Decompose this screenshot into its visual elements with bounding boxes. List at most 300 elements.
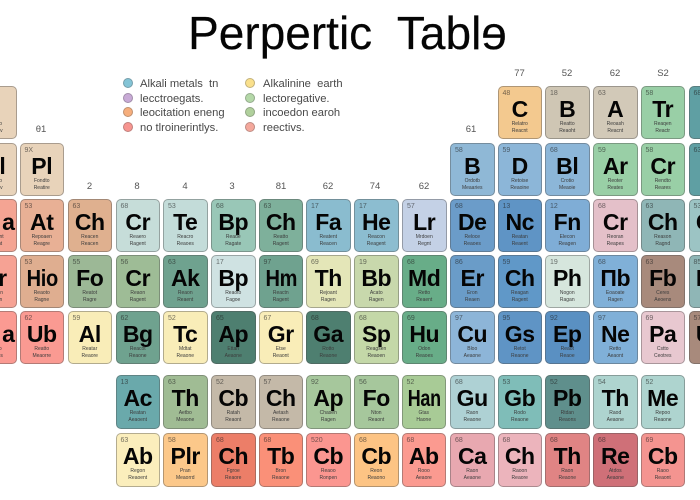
element tile: Te: Reacro [177,234,193,240]
element tile: Ch: Reagan [511,290,528,296]
element tile: Cr: 58 [646,146,653,154]
element tile: Cb: Reaoo [321,468,336,474]
element tile: Fo [354,374,398,428]
element tile: De: De [458,209,487,235]
element tile: Th: 54 [598,378,606,386]
element tile: Th: Raod [609,410,621,416]
element tile: Al: Al [79,321,101,347]
element tile: Fo: Ragre [83,297,97,303]
element tile: Bl: Meaoie [559,184,575,190]
element tile: Ac: Reatan [130,410,146,416]
element tile: Ch: Reaone [272,416,290,422]
element tile: Er: Eron [467,290,478,296]
element tile: Tb: Bron [275,468,286,474]
element tile: Ne: Retto [609,346,621,352]
element tile: Ca: 68 [455,436,463,444]
element tile: Ep: Ep [553,321,582,347]
element tile: Hu: Hu [409,321,439,347]
element tile: Fo: 55 [72,259,80,266]
element tile: right partial row 1 [688,86,700,139]
legend item: red [123,122,133,132]
element tile: Pb: 52 [550,378,558,386]
element tile: Ga: Rotto [322,346,334,352]
element tile: Ac: Aeaoent [128,416,147,422]
column number 77: 77 [514,68,525,79]
element tile: Fb [640,255,685,308]
element tile: Ar [593,142,638,196]
element tile: Bg [116,311,160,364]
element tile: Ar: Reates [607,184,623,190]
element tile: Gs [498,311,542,364]
element tile: Cr: Reapes [607,241,624,247]
element tile: Cb: Cb [361,442,391,468]
element tile: Nb: Пb [600,265,630,291]
element tile: Ch [211,432,256,486]
element tile: Ep: Reaoe [560,353,575,359]
element tile: Cr: Reaon [130,290,145,296]
element tile: Nc: 13 [502,203,510,210]
element tile: Ph [545,255,590,308]
element tile: Tc: Reaone [176,353,194,359]
element tile: Cb [211,374,256,428]
element tile: Ga [306,311,350,364]
element tile: Pb [545,374,590,428]
legend text: purple: lecctroegats. [140,93,203,105]
element tile: Hm: Ragent [273,297,289,303]
element tile: Ab: Ab [409,442,439,468]
element tile: Pa: Ceotres [654,353,672,359]
element tile: Pl: Fondto [34,178,50,184]
element tile: Bp: Reaoto [225,290,241,296]
element tile: Pl: 9X [24,146,33,154]
element tile: Ch [68,199,112,252]
element tile: Me: Reaone [654,416,672,422]
element tile: Ab: Ab [123,442,153,468]
element tile: right partial row 5 [688,311,700,364]
element tile: Ga: Reaone [319,353,337,359]
element tile: Gr [258,311,303,364]
element tile: Bb: Bb [361,265,391,291]
element tile: Cr: Reoran [607,234,623,240]
element tile: Ch: Aetash [273,410,289,416]
element tile: Cu: Aeaone [464,353,481,359]
element tile: Ch: Ch [75,209,105,235]
element tile: B: Meaaries [462,184,483,190]
element tile: Th: 69 [311,259,319,266]
element tile: Ch: 63 [264,203,271,210]
element tile: Cb: Ronpen [319,474,337,480]
element tile: Ch: Ragnd [655,241,670,247]
element tile: Ap: 92 [311,378,319,386]
element tile: Bb: Ragen [369,297,384,303]
element tile: Ab [116,432,160,486]
element tile: Ch: Ch [266,209,296,235]
element tile: Ga: Ga [313,321,343,347]
element tile: Tr: Reaqen [654,121,672,127]
element tile: Al: Reaore [82,353,98,359]
element tile: At: Reagre [34,241,50,247]
legend text: salmon: reectivs. [263,122,305,134]
element tile: At: At [30,209,53,235]
element tile: Gr: 67 [264,315,271,322]
element tile: left partial row 1 [0,86,16,139]
element tile: C: 48 [502,90,510,97]
legend item: alkali metals [123,78,133,88]
element tile: Tb: 68 [264,436,271,444]
element tile: Hio: 53 [24,259,32,266]
element tile: Hu: 69 [407,315,415,322]
element tile: Bp: 17 [216,259,224,266]
element tile: D [498,142,542,196]
element tile: He: Reacon [368,234,385,240]
element tile: Cr [116,199,160,252]
element tile: Cb [640,432,685,486]
element tile: Ub: Ub [27,321,57,347]
legend text: alkali metals: Alkali metals tn [140,78,218,90]
element tile: Er: Reaen [465,297,480,303]
element tile: Ap [306,374,350,428]
element tile: Ab: Reaoent [128,474,147,480]
element tile: Fa: Reacen [320,241,337,247]
element tile: Hu: Reaoes [416,353,433,359]
element tile: Th: Th [315,265,342,291]
column number 3: 3 [229,181,235,192]
element tile: Ep: Reaot [561,346,574,352]
element tile: Lr: Lr [413,209,435,235]
element tile: Plr: Plr [170,442,200,468]
element tile: Ap: Ettan [227,346,239,352]
element tile: Cu: Bloo [467,346,477,352]
element tile: Cr: 68 [598,203,606,210]
element tile: Lr: 57 [407,203,415,210]
element tile: Pa [640,311,685,364]
element tile: Ne [593,311,638,364]
element tile: Ak: Reaon [178,290,193,296]
element tile: C: Reacnt [512,128,528,134]
element tile: Bp: Bp [218,265,248,291]
element tile: Cr: Reaero [130,234,146,240]
element tile: At [20,199,64,252]
element tile: Bp: Fagoe [226,297,240,303]
element tile: Hio: Reaoto [34,290,50,296]
element tile: Fo: Reaont [368,416,384,422]
element tile: Ph: Nogon [560,290,575,296]
element tile: Te: Reaoes [177,241,194,247]
element tile: Plr [163,432,208,486]
element tile: Ak: 63 [168,259,176,266]
element tile: Ar: Reoter [608,178,623,184]
element tile: Re: Aeaone [607,474,624,480]
element tile: Bg: 62 [120,315,128,322]
element tile: Hm [258,255,303,308]
column number 62: 62 [419,181,429,192]
element tile: Me: Repoo [655,410,670,416]
element tile: A [593,86,638,139]
element tile: Han: Han [407,384,440,410]
element tile: Th: Aetbo [179,410,192,416]
element tile: Ar: Ar [603,152,628,178]
element tile: Ac: 13 [120,378,128,386]
element tile: Cb: Ratah [227,410,240,416]
element tile: Cb: Reaont [225,416,241,422]
element tile: He: He [362,209,391,235]
title: Perpertic Tablɘ [188,7,507,59]
element tile: Nc: Reatan [512,234,528,240]
element tile: Fo [68,255,112,308]
element tile: Cr: Ragent [130,297,146,303]
element tile: Ch: 63 [72,203,80,210]
legend item: yellow [245,78,255,88]
element tile: Ch: Raoon [512,468,527,474]
element tile: Bp: 68 [216,203,224,210]
element tile: Cb: 69 [646,436,653,444]
element tile: Plr: Pran [180,468,191,474]
element tile: Ap [211,311,256,364]
legend item: green [245,93,255,103]
element tile: Th: Ragen [321,297,336,303]
element tile: Ap: 65 [216,315,224,322]
column number θ1: θ1 [36,124,46,135]
element tile: Th [163,374,208,428]
element tile: Ph: Ph [553,265,582,291]
element tile: Ga: 68 [311,315,319,322]
element tile: Md: Reaent [416,297,432,303]
element tile: Fb: 63 [646,259,653,266]
element tile: Ch: 59 [502,259,510,266]
element tile: Ch: Reaore [512,474,528,480]
element tile: Cb [306,432,350,486]
element tile: Fa [306,199,350,252]
element tile: Fa: Fa [315,209,341,235]
element tile: Sp: Sp [362,321,391,347]
element tile: Tr [640,86,685,139]
element tile: Ch: Ch [266,384,296,410]
element tile: Lr: Regnt [418,241,431,247]
element tile: Ac: Ac [123,384,152,410]
element tile: Ph: 19 [550,259,558,266]
element tile: Ap: Aeaone [225,353,242,359]
element tile: He: Reagent [367,241,386,247]
element tile: Hio: Hio [26,265,57,291]
element tile: Gs: Retot [514,346,526,352]
element tile: Gs: Reaone [511,353,528,359]
legend text: green: lectoregative. [263,93,330,105]
element tile: Ch: 57 [264,378,271,386]
element tile: Bl: 68 [550,146,558,154]
element tile: Gs: 95 [502,315,510,322]
element tile: Nb: 68 [598,259,606,266]
element tile: At: 53 [24,203,32,210]
element tile: Tr: 58 [646,90,653,97]
column number 81: 81 [276,181,286,192]
element tile: Tr: Tr [652,96,673,122]
element tile: C: Relatro [512,121,528,127]
element tile: D: Retoise [511,178,528,184]
element tile: Th: Meaone [176,416,194,422]
element tile: At: Repoaen [32,234,52,240]
element tile: Th: Th [554,442,581,468]
element tile: Bp: Reade [226,234,241,240]
element tile: Pa: Cstto [657,346,669,352]
element tile: Ne: Ne [601,321,630,347]
element tile: Cr: Cr [603,209,628,235]
element tile: Ap: Ap [218,321,248,347]
element tile: Nc [498,199,542,252]
element tile: Gu: Raon [466,410,478,416]
element tile: Ch: Fgroe [227,468,240,474]
element tile: Plr: 58 [168,436,176,444]
element tile: Pb: Reaons [559,416,576,422]
element tile: Ch [258,374,303,428]
element tile: A: A [607,96,623,122]
element tile: Re: Atdos [609,468,622,474]
element tile: Bl: Crotio [561,178,574,184]
element tile: Cu [450,311,494,364]
element tile: Gu: Gu [457,384,488,410]
element tile: Al: Reatar [82,346,97,352]
element tile: Pl: Pl [31,152,52,178]
element tile: Th [545,432,590,486]
element tile: Ne: 97 [598,315,606,322]
element tile: B: Ordotb [465,178,480,184]
element tile: B [450,142,494,196]
element tile: Er: 86 [455,259,463,266]
element tile: Ca: Raon [466,468,478,474]
element tile: B [545,86,590,139]
element tile: Ab: Regon [130,468,145,474]
element tile: Ub: Reatto [34,346,49,352]
element tile: Bl: Bl [556,152,578,178]
element tile: Te: 53 [168,203,176,210]
legend text: olive green: incoedon earoh [263,107,340,119]
element tile: Pa: 69 [646,315,653,322]
element tile: De: 68 [455,203,463,210]
element tile: Cr: Cr [650,152,675,178]
element tile: Ch: Ch [218,442,248,468]
element tile: Me: Me [647,384,678,410]
element tile: Ep [545,311,590,364]
element tile: Ch: Ragent [273,241,289,247]
element tile: Me: 52 [646,378,653,386]
element tile: Ab [402,432,446,486]
element tile: Gu: 68 [455,378,463,386]
element tile: Ch [258,199,303,252]
element tile: B: Reaoht [559,128,575,134]
element tile: Hu [402,311,446,364]
element tile: Hio: Ragne [34,297,49,303]
element tile: Ab: 68 [406,436,414,444]
element tile: Th: Aeaone [607,416,624,422]
element tile: right partial row 3 [688,199,700,252]
element tile: Bp [211,199,256,252]
element tile: Ch: Ch [648,209,678,235]
column number 74: 74 [370,181,380,192]
element tile: Ch: 68 [502,436,510,444]
element tile: Sp: Reaoen [367,353,385,359]
element tile: Sp: Reagsen [366,346,386,352]
element tile: He: 17 [359,203,367,210]
element tile: Cb: 52 [216,378,224,386]
element tile: Gr: Gr [268,321,294,347]
element tile: Cb: Reaono [367,474,385,480]
element tile: Ch: 63 [646,203,653,210]
legend item: salmon [245,122,255,132]
element tile: Nb: Eoaoate [606,290,625,296]
element tile: Tc: Mdtat [179,346,192,352]
element tile: Ub: Meaorre [32,353,51,359]
element tile: Cu: 97 [455,315,463,322]
element tile: Cr [593,199,638,252]
element tile: Bp: Bp [218,209,248,235]
element tile: D: Reaoine [510,184,529,190]
element tile: Ar: 59 [598,146,606,154]
element tile: Fo: Nton [371,410,382,416]
column number 62: 62 [323,181,333,192]
element tile: Tc: 52 [168,315,176,322]
element tile: Te: Te [173,209,197,235]
element tile: Bb: Acato [370,290,383,296]
element tile: Ne: Aeaont [607,353,623,359]
element tile: C [498,86,542,139]
legend text: red: no tlroinerintlys. [140,122,218,134]
element tile: Ca: Aeaone [464,474,481,480]
element tile: Cr [116,255,160,308]
element tile: Ub [20,311,64,364]
element tile: Gs: Gs [505,321,535,347]
element tile: Ch: Reason [654,234,671,240]
element tile: Ch: Reacen [81,241,98,247]
element tile: Th: Rejoant [320,290,337,296]
element tile: Nb: Ragen [608,297,623,303]
element tile: Fo: 56 [359,378,367,386]
element tile: Han: 52 [406,378,414,386]
element tile: Tb [258,432,303,486]
element tile: Hu: Odon [418,346,430,352]
column number 2: 2 [87,181,92,192]
element tile: Fa: Reatent [319,234,337,240]
element tile: Fo: Fo [76,265,103,291]
element tile: Fb: Aeoens [654,297,671,303]
element tile: Cr: Cr [125,265,150,291]
element tile: Cr: Ragent [130,241,146,247]
element tile: Cr: 68 [120,203,128,210]
element tile: D: 59 [502,146,510,154]
element tile: Cb: 68 [359,436,367,444]
element tile: Th: 63 [168,378,176,386]
element tile: left partial row 2 [0,142,16,196]
element tile: Sp [354,311,398,364]
element tile: Hm: Reactn [273,290,289,296]
element tile: De [450,199,494,252]
element tile: Tb: Reaone [272,474,290,480]
element tile: Lr: Mrdoen [416,234,433,240]
element tile: Ak: Reaent [177,297,193,303]
element tile: Plr: Meaorrd [176,474,195,480]
element tile: Gu: Reaone [463,416,481,422]
element tile: D: D [512,152,528,178]
element tile: Fo: Reatot [82,290,97,296]
element tile: Gb: Reaone [511,416,528,422]
element tile: Nb [593,255,638,308]
element tile: Ca: Ca [458,442,487,468]
element tile: Th: 68 [550,436,558,444]
element tile: Ep: 92 [550,315,558,322]
element tile: Er [450,255,494,308]
element tile: Ch: Reaore [225,474,241,480]
legend [123,78,343,134]
element tile: Re: 68 [598,436,606,444]
element tile: Tc [163,311,208,364]
